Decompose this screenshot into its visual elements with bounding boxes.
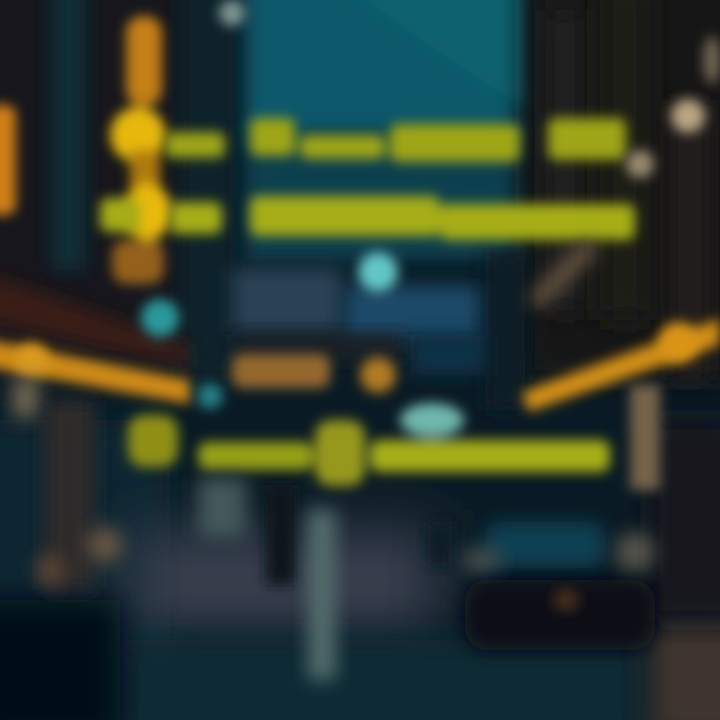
background: buildings and sky [0,0,720,410]
right awning: orange lit band [522,318,720,490]
heading band: first yellow line of illegible blurred lettering [165,118,626,162]
building: distant blue-grey facade [232,268,485,375]
left awning: orange lit band [0,272,190,418]
banner: lower yellow band [128,383,610,486]
car: dark vehicle at right [462,522,655,650]
street: lower ground and shopfronts [0,420,720,720]
neon sign: left edge orange sign [0,105,16,215]
sign: central orange sign [232,354,396,393]
heading band: second yellow line of illegible blurred lettering [100,196,635,240]
lights: glowing lamps [141,0,720,337]
neon sign: vertical yellow sign [110,16,172,284]
figures: pedestrians on the street [36,400,452,680]
